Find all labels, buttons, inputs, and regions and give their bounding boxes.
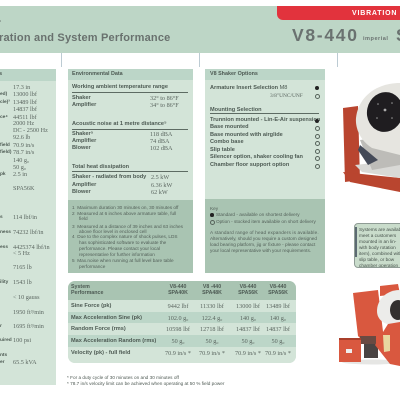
- key and notes: Key: [210, 206, 218, 211]
- mounting selection: Base mounted: [210, 124, 249, 130]
- key and notes: Standard - available on shortest delivery: [216, 212, 300, 217]
- temperature range section: [72, 84, 188, 109]
- red category tab: [277, 6, 400, 20]
- footnotes: 1 Maximum duration 30 minutes on, 30 minutes off: [72, 205, 178, 210]
- mounting selection: Chamber floor support option: [210, 162, 289, 168]
- panel: V8 shaker options: [205, 69, 325, 273]
- specification rows: ility: [0, 280, 8, 285]
- specification rows: SPA56K: [13, 185, 34, 192]
- callout text: with body rotation: [359, 245, 396, 250]
- temperature range section: 34° to 86°F: [150, 102, 179, 109]
- mounting selection: Trunnion mounted - Lin-E-Air suspension: [210, 117, 320, 123]
- table footnotes: * For a duty cycle of 30 minutes on and 30 minutes off: [67, 375, 179, 380]
- armature insert options: 3/8"UNC/UNF: [270, 93, 303, 99]
- specification rows: uired: [0, 338, 12, 343]
- row: random force: 14837 lbf: [236, 326, 260, 333]
- callout text: mounted in an lin-: [359, 239, 396, 244]
- row: max acceleration random: 50 g₀: [242, 338, 254, 345]
- specification rows: nts: [0, 353, 7, 358]
- footnotes: performance: [79, 264, 105, 269]
- row: max acceleration sine: 140 g₀: [240, 315, 256, 322]
- row: velocity: Velocity (pk) - full field: [71, 350, 130, 356]
- row: random force: [68, 323, 296, 335]
- footnotes: 3 Measured at a distance of 39 inches and 63 inches: [72, 224, 183, 229]
- specification rows: [0, 84, 50, 366]
- footnotes: field: [79, 216, 88, 221]
- footnotes: above floor level in enclosed cell: [79, 229, 146, 234]
- specification rows: 92.6 lb: [13, 134, 30, 141]
- table header: SPA48K: [202, 290, 222, 296]
- table: system performance: [68, 281, 296, 363]
- acoustic noise section: 118 dBA: [150, 131, 172, 138]
- armature insert options: [210, 85, 320, 99]
- specification rows: 44511 lbf: [13, 114, 37, 121]
- panel heading: [0, 69, 56, 81]
- row: velocity: 70.9 in/s *: [235, 350, 261, 357]
- mounting selection: Silencer option, shaker cooling fan: [210, 154, 303, 160]
- callout text: chamber operation: [359, 263, 398, 268]
- row: random force: 12718 lbf: [200, 326, 224, 333]
- specification rows: s: [0, 215, 3, 220]
- specification rows: 65.5 kVA: [13, 359, 37, 366]
- specification rows: field: [0, 143, 10, 148]
- specification rows: ed): [0, 92, 7, 97]
- specification rows: 70.9 in/s: [13, 142, 34, 149]
- temperature range section: Amplifier: [72, 102, 96, 108]
- specification rows: < 10 gauss: [13, 294, 40, 301]
- row: max acceleration sine: Max Acceleration Sine (pk): [71, 315, 142, 321]
- temperature range section: Shaker: [72, 95, 91, 101]
- heat dissipation section: 2.5 kW: [151, 174, 169, 181]
- row: velocity: [68, 347, 296, 363]
- panel heading: [68, 69, 193, 80]
- table header: V8-440: [170, 284, 186, 290]
- row: random force: Random Force (rms): [71, 326, 126, 332]
- key and notes: Option - stocked item available on short delivery: [216, 219, 316, 224]
- row: max acceleration random: 50 g₀: [172, 338, 184, 345]
- footnotes: representative for further information: [79, 252, 155, 257]
- acoustic noise section: Amplifier: [72, 138, 96, 144]
- callout text: meet a customers: [359, 233, 396, 238]
- mounting selection: Base mounted with airglide: [210, 132, 283, 138]
- heat dissipation section: 6.36 kW: [151, 182, 172, 189]
- row: max acceleration sine: [68, 312, 296, 323]
- specification rows: 14837 lbf: [13, 106, 37, 113]
- specification rows: ess: [0, 245, 8, 250]
- row: velocity: 70.9 in/s *: [165, 350, 191, 357]
- heat dissipation section: Total heat dissipation: [72, 164, 129, 170]
- temperature range section: 32° to 86°F: [150, 95, 179, 102]
- heat dissipation section: 62 kW: [151, 189, 168, 196]
- acoustic noise section: Shaker⁵: [72, 131, 93, 137]
- row: max acceleration sine: 122.4 g₀: [202, 315, 222, 322]
- specification rows: pk: [0, 172, 6, 177]
- row: sine force: 13000 lbf: [236, 303, 260, 310]
- temperature range section: Working ambient temperature range: [72, 84, 168, 90]
- table footnotes: * 78.7 in/s velocity limit can be achieved when operating at 50 % field power: [67, 381, 224, 386]
- heat dissipation section: [72, 164, 188, 196]
- row: sine force: 9442 lbf: [168, 303, 188, 310]
- row: max acceleration sine: 102.0 g₀: [168, 315, 188, 322]
- table header: [68, 281, 296, 300]
- mounting selection: Slip table: [210, 147, 235, 153]
- specification rows: 17.3 in: [13, 84, 30, 91]
- specification rows: < 5 Hz: [13, 250, 30, 257]
- heat dissipation section: Amplifier: [72, 182, 96, 188]
- row: max acceleration sine: 140 g₀: [270, 315, 286, 322]
- armature insert options: Armature Insert Selection M8: [210, 85, 287, 91]
- header band: [0, 6, 400, 53]
- key and notes: load bearing platform, jig or fixture - please contact: [210, 242, 315, 247]
- specification rows: 2000 Hz: [13, 120, 34, 127]
- acoustic noise section: 102 dBA: [150, 145, 173, 152]
- table header: SPA56K: [268, 290, 288, 296]
- row: max acceleration random: [68, 335, 296, 347]
- specification rows: 140 g₀: [13, 157, 29, 164]
- row: sine force: [68, 300, 296, 312]
- specification rows: 50 g₀: [13, 164, 26, 171]
- acoustic noise section: Blower: [72, 145, 91, 151]
- footnotes: [68, 200, 193, 273]
- specification rows: 13000 lbf: [13, 91, 37, 98]
- model name: V8-440: [292, 25, 359, 45]
- specification rows: 2.5 in: [13, 171, 27, 178]
- specification rows: 114 lbf/in: [13, 214, 37, 221]
- callout text: [359, 227, 400, 268]
- key and notes: Alternatively, should you require a custom designed: [210, 236, 317, 241]
- footnotes: 4 Due to the complex nature of shock pulses, LDS: [72, 234, 178, 239]
- table header: System: [71, 284, 90, 290]
- unit label: imperial: [363, 36, 388, 42]
- footnotes: has sophisticated software to evaluate the: [79, 240, 166, 245]
- specification rows: ce⁴: [0, 115, 8, 120]
- mounting selection: [210, 107, 320, 169]
- specification rows: 1695 ft³/min: [13, 323, 44, 330]
- specification rows: 100 psi: [13, 337, 31, 344]
- title: ration and System Performance: [0, 32, 170, 44]
- specification rows: DC - 2500 Hz: [13, 127, 48, 134]
- table header: V8 -440: [203, 284, 221, 290]
- heat dissipation section: Blower: [72, 189, 91, 195]
- table header: SPA56K: [238, 290, 258, 296]
- row: max acceleration random: 50 g₀: [272, 338, 284, 345]
- specification rows: r: [0, 324, 2, 329]
- acoustic noise section: 74 dBA: [150, 138, 169, 145]
- row: velocity: 70.9 in/s *: [265, 350, 291, 357]
- acoustic noise section: [72, 121, 188, 152]
- photo: shaker with head expander: [343, 83, 400, 192]
- panel: shaker specifications: [0, 69, 56, 385]
- row: sine force: Sine Force (pk): [71, 303, 111, 309]
- panel heading: Environmental Data: [72, 71, 123, 77]
- specification rows: 74232 lbf/in: [13, 229, 43, 236]
- row: velocity: 70.9 in/s *: [199, 350, 225, 357]
- specification rows: 1950 ft³/min: [13, 309, 44, 316]
- mounting selection: Mounting Selection: [210, 107, 262, 113]
- callout text: slip table, or bow: [359, 257, 394, 262]
- specification rows: ness: [0, 230, 11, 235]
- table header: V8-440: [270, 284, 286, 290]
- row: sine force: 11330 lbf: [200, 303, 224, 310]
- table header: Performance: [71, 290, 103, 296]
- panel: environmental data: [68, 69, 193, 273]
- row: sine force: 13489 lbf: [266, 303, 290, 310]
- specification rows: cle)³: [0, 100, 10, 105]
- row: random force: 14837 lbf: [266, 326, 290, 333]
- footnotes: 2 Measured at 6 inches above armature table, full: [72, 211, 176, 216]
- footnotes: 5 Max.noise when running at full level bare table: [72, 258, 174, 263]
- row: max acceleration random: Max Acceleration Random (rms): [71, 338, 156, 344]
- table footnotes: [67, 375, 224, 386]
- panel heading: V8 Shaker Options: [210, 71, 258, 77]
- specification rows: 4425374 lbf/in: [13, 244, 50, 251]
- specification rows: er: [0, 360, 5, 365]
- photo: shaker with amplifier base: [339, 284, 400, 366]
- key and notes: A standard range of head expanders is available.: [210, 230, 319, 235]
- table header: SPA40K: [168, 290, 188, 296]
- row: random force: 10598 lbf: [166, 326, 190, 333]
- acoustic noise section: Acoustic noise at 1 metre distance⁵: [72, 121, 167, 127]
- mounting selection: Combo base: [210, 139, 244, 145]
- table header: V8-440: [240, 284, 256, 290]
- heat dissipation section: Shaker - radiated from body: [72, 174, 146, 180]
- specification rows: field): [0, 150, 11, 155]
- specification rows: 1543 lb: [13, 279, 32, 286]
- specification rows: 13489 lbf: [13, 99, 37, 106]
- panel heading: [205, 69, 325, 80]
- key and notes: [205, 199, 325, 273]
- tab label: VIBRATION: [352, 10, 397, 17]
- row: max acceleration random: 50 g₀: [206, 338, 218, 345]
- specification rows: 78.7 in/s: [13, 149, 34, 156]
- footnotes: performance. Please contact your local: [79, 246, 160, 251]
- callout accent bar: [355, 227, 357, 257]
- callout: system availability: [354, 223, 400, 268]
- specification rows: 7165 lb: [13, 264, 32, 271]
- key and notes: your local representative with your requirements.: [210, 248, 311, 253]
